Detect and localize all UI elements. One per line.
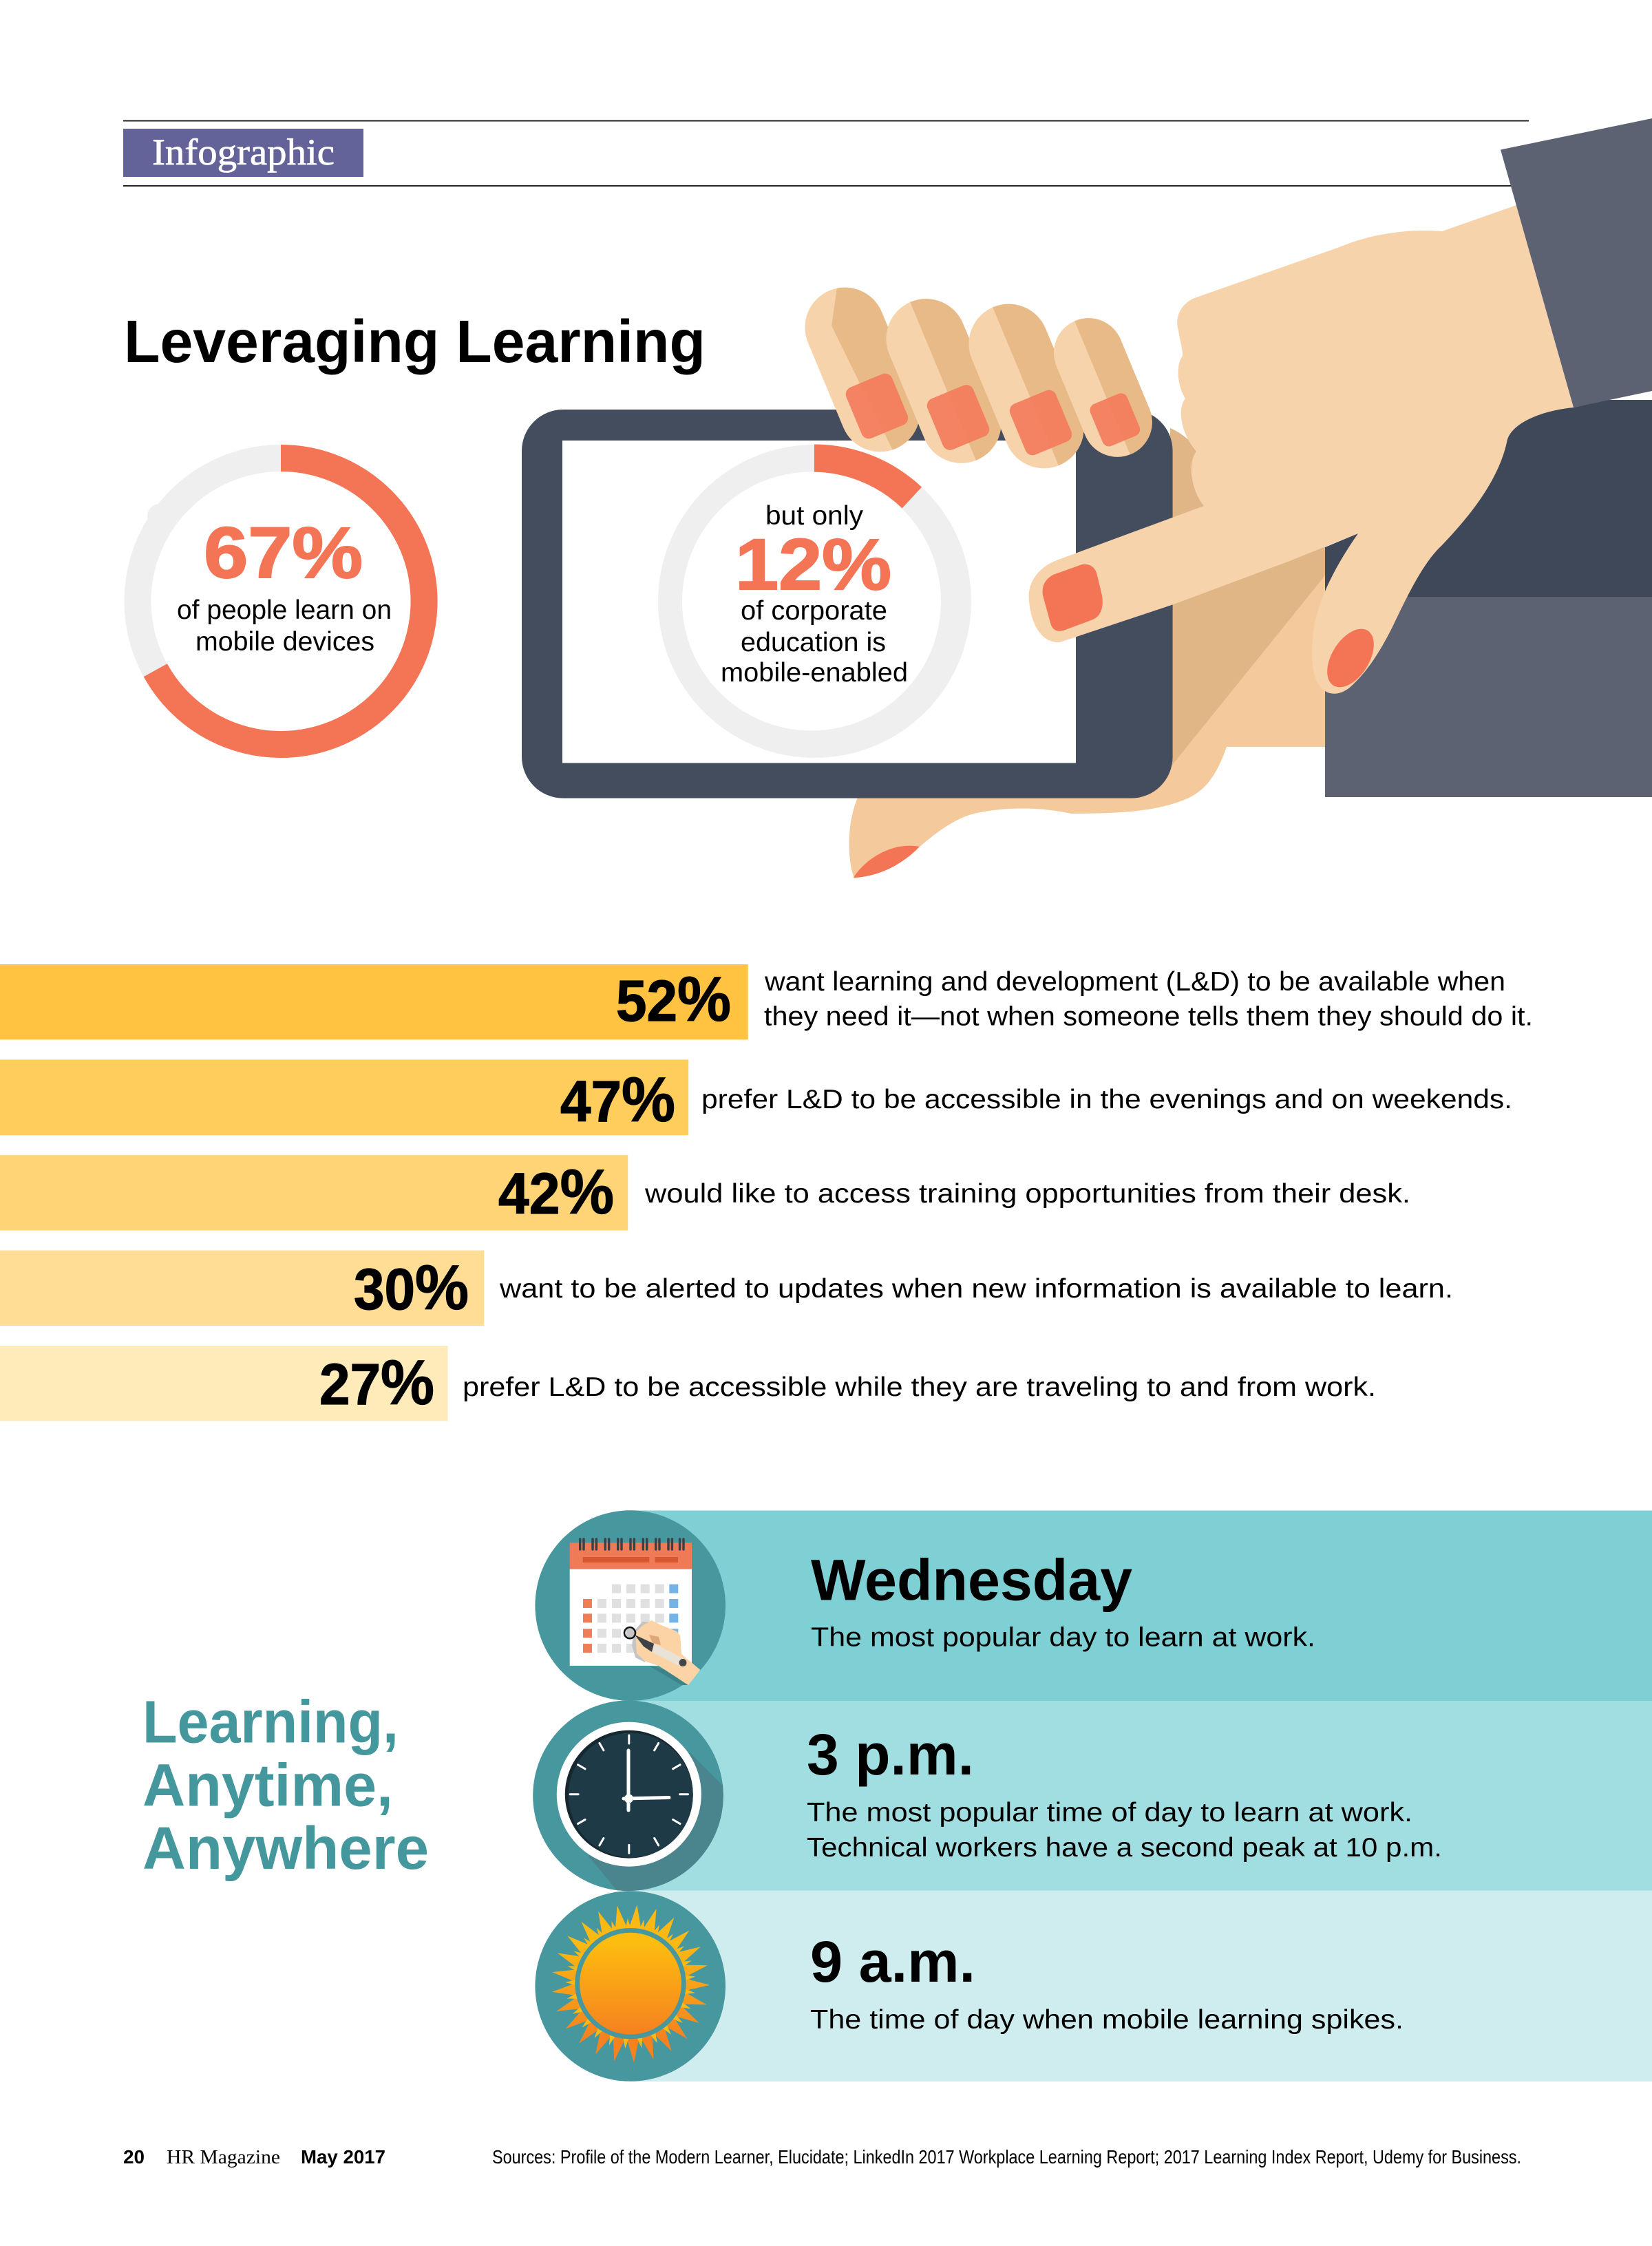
illustration: phone <box>522 410 1173 798</box>
donut chart: 67% <box>138 458 424 745</box>
bar chart: learner preferences <box>0 964 1533 1421</box>
bar 42%: would like to access training opportunities from their desk. <box>644 1179 1410 1209</box>
bar 47%: 47% <box>560 1065 675 1135</box>
bar 27%: prefer L&D to be accessible while they are traveling to and from work. <box>463 1373 1376 1402</box>
icon: index fingernail <box>1043 564 1103 631</box>
finger one <box>805 288 918 452</box>
panel: 3 p.m.: The most popular time of day to learn at work. <box>807 1798 1412 1827</box>
heading: Learning, Anytime, Anywhere: Learning, <box>142 1689 399 1756</box>
donut chart: 12%: but only <box>765 501 864 531</box>
title: Leveraging Learning <box>124 308 706 375</box>
icon: calendar <box>535 1510 726 1701</box>
finger two <box>887 299 1001 463</box>
panel: 3 p.m.: Technical workers have a second peak at 10 p.m. <box>807 1833 1442 1863</box>
illustration: gripping fingers <box>805 288 1152 468</box>
panel: 9 a.m.: 9 a.m. <box>810 1929 975 1994</box>
heading: Learning, Anytime, Anywhere: Anywhere <box>142 1815 429 1882</box>
bar 52%: they need it—not when someone tells them they should do it. <box>764 1002 1533 1031</box>
illustration: upper hand with pointing finger <box>1029 205 1574 695</box>
donut chart: 12%: mobile-enabled <box>721 658 908 688</box>
panel: 9 a.m.: The time of day when mobile learning spikes. <box>810 2005 1404 2035</box>
footer: page folio <box>123 2146 385 2168</box>
section tag: Infographic <box>123 129 363 177</box>
bar 27% <box>0 1346 1376 1421</box>
donut chart: 12%: of corporate <box>741 596 887 626</box>
finger four <box>1054 318 1152 457</box>
icon: sun <box>535 1891 726 2081</box>
donut chart: 12%: education is <box>741 628 886 657</box>
illustration: suit jacket <box>1325 400 1652 797</box>
bar 27%: 27% <box>319 1348 434 1418</box>
bar 42% <box>0 1155 1410 1231</box>
bar 52% <box>0 964 1533 1039</box>
footer: page folio: May 2017 <box>301 2146 385 2168</box>
panel: 9 a.m. <box>630 1890 1652 2081</box>
panel: 3 p.m.: 3 p.m. <box>807 1722 974 1787</box>
heading: Learning, Anytime, Anywhere: Anytime, <box>142 1752 393 1819</box>
section tag: Infographic: Infographic <box>152 131 335 173</box>
donut chart: 67%: mobile devices <box>195 627 374 657</box>
bar 52%: 52% <box>616 964 731 1035</box>
panel: Wednesday: The most popular day to learn at work. <box>811 1623 1315 1653</box>
bar 47% <box>0 1059 1512 1135</box>
bar 52%: want learning and development (L&D) to be available when <box>764 967 1505 997</box>
icon: middle fingernail <box>1317 621 1384 695</box>
donut chart: 67%: of people learn on <box>177 595 392 625</box>
bar 30% <box>0 1251 1453 1326</box>
illustration: hand holding phone, lower palm <box>849 428 1325 878</box>
heading: Learning, Anytime, Anywhere <box>142 1689 429 1882</box>
finger three <box>969 304 1083 468</box>
footer: page folio: 20 <box>123 2146 145 2168</box>
illustration: sleeve cuff <box>1501 118 1652 407</box>
footer: page folio: HR Magazine <box>167 2146 280 2168</box>
donut chart: 67%: 67% <box>204 513 363 593</box>
bar 30%: 30% <box>354 1253 469 1323</box>
icon: clock <box>533 1700 730 1900</box>
panel: Wednesday <box>630 1510 1652 1701</box>
bar 42%: 42% <box>498 1157 614 1227</box>
panel: 3 p.m. <box>628 1701 1652 1890</box>
bar 47%: prefer L&D to be accessible in the evenings and on weekends. <box>701 1085 1512 1114</box>
panel: Wednesday: Wednesday <box>811 1547 1132 1612</box>
bar 30%: want to be alerted to updates when new information is available to learn. <box>499 1274 1453 1304</box>
donut chart: 12%: 12% <box>735 525 891 605</box>
donut chart: 12% <box>658 445 971 758</box>
